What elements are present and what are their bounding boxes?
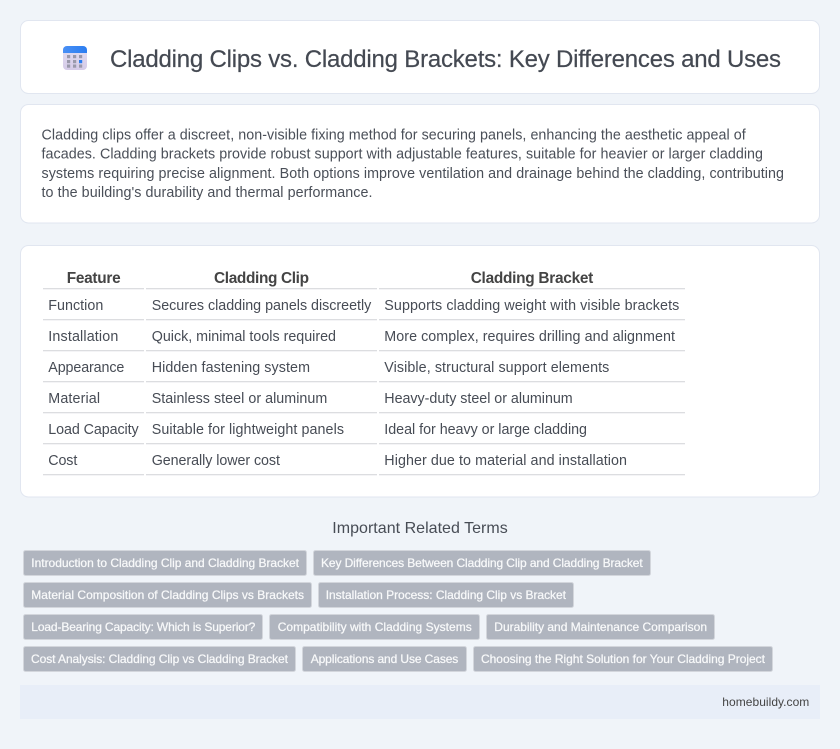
text block: introduction paragraph: to the building's durability and thermal performance. — [42, 185, 372, 201]
table row: cost: Higher due to material and installation — [384, 453, 627, 469]
table header row: Cladding Clip — [214, 270, 309, 287]
tag: compatibility: Compatibility with Cladding Systems — [278, 620, 472, 634]
tag: installation process — [318, 582, 574, 608]
tag: introduction — [24, 550, 306, 576]
text block: introduction paragraph: systems requiring precise alignment. Both options improve ventilation and drainage behind the cladding, contributing — [42, 166, 784, 182]
table row: appearance: Visible, structural support elements — [384, 360, 609, 376]
table row: cost — [43, 453, 685, 475]
table row: appearance: Appearance — [48, 360, 124, 376]
table row: material — [43, 391, 685, 413]
tag: cost analysis — [24, 646, 296, 672]
panel: comparison table — [20, 246, 820, 497]
icon: calendar — [63, 46, 87, 70]
table row: function: Supports cladding weight with visible brackets — [384, 298, 679, 314]
table row: function: Function — [48, 298, 103, 314]
heading: important related terms: Important Related Terms — [332, 520, 508, 537]
footer — [20, 685, 820, 719]
text block: introduction paragraph — [42, 127, 784, 201]
tag: load-bearing capacity: Load-Bearing Capacity: Which is Superior? — [31, 620, 256, 634]
table row: installation — [43, 329, 685, 351]
table row: installation: More complex, requires drilling and alignment — [384, 329, 675, 345]
tag: compatibility — [270, 614, 480, 640]
panel: introduction — [20, 104, 820, 223]
tag: key differences: Key Differences Between Cladding Clip and Cladding Bracket — [321, 556, 643, 570]
tag: material composition: Material Composition of Cladding Clips vs Brackets — [31, 588, 304, 602]
tag: applications: Applications and Use Cases — [311, 652, 458, 666]
table row: load capacity: Load Capacity — [48, 422, 140, 438]
table row: function — [43, 298, 685, 320]
tag: choosing the right solution — [474, 646, 772, 672]
tag: durability: Durability and Maintenance Comparison — [494, 620, 707, 634]
table row: function: Secures cladding panels discreetly — [152, 298, 372, 314]
tag: key differences — [314, 550, 650, 576]
tag: durability — [486, 614, 714, 640]
table header row: Feature — [67, 270, 121, 287]
table header row: Cladding Bracket — [471, 270, 593, 287]
table row: material: Material — [48, 391, 100, 407]
tag: material composition — [24, 582, 312, 608]
panel: related term tags — [24, 550, 772, 672]
text block: introduction paragraph: Cladding clips offer a discreet, non-visible fixing method for securing panels, enhancing the aesthetic appeal of — [42, 127, 746, 143]
table row: material: Stainless steel or aluminum — [152, 391, 327, 407]
table row: installation: Quick, minimal tools required — [152, 329, 336, 345]
panel: title header — [20, 20, 820, 94]
table row: load capacity — [43, 422, 685, 444]
text block: introduction paragraph: facades. Cladding brackets provide robust support with adjustable features, suitable for heavier or larger cladding — [42, 147, 763, 163]
tag: applications — [302, 646, 466, 672]
table row: material: Heavy-duty steel or aluminum — [384, 391, 573, 407]
table row: cost: Cost — [48, 453, 77, 469]
tag: choosing the right solution: Choosing the Right Solution for Your Cladding Project — [481, 652, 766, 666]
table row: appearance: Hidden fastening system — [152, 360, 310, 376]
table header row — [43, 270, 685, 289]
table row: cost: Generally lower cost — [152, 453, 280, 469]
table row: load capacity: Ideal for heavy or large cladding — [384, 422, 587, 438]
table row: appearance — [43, 360, 685, 382]
tag: introduction: Introduction to Cladding Clip and Cladding Bracket — [31, 556, 300, 570]
tag: cost analysis: Cost Analysis: Cladding Clip vs Cladding Bracket — [31, 652, 289, 666]
tag: load-bearing capacity — [24, 614, 262, 640]
table row: load capacity: Suitable for lightweight panels — [152, 422, 344, 438]
table row: installation: Installation — [48, 329, 118, 345]
tag: installation process: Installation Process: Cladding Clip vs Bracket — [326, 588, 567, 602]
footer source text: homebuildy.com — [722, 695, 809, 709]
title: Cladding Clips vs. Cladding Brackets: Key Differences and Uses — [110, 46, 781, 73]
